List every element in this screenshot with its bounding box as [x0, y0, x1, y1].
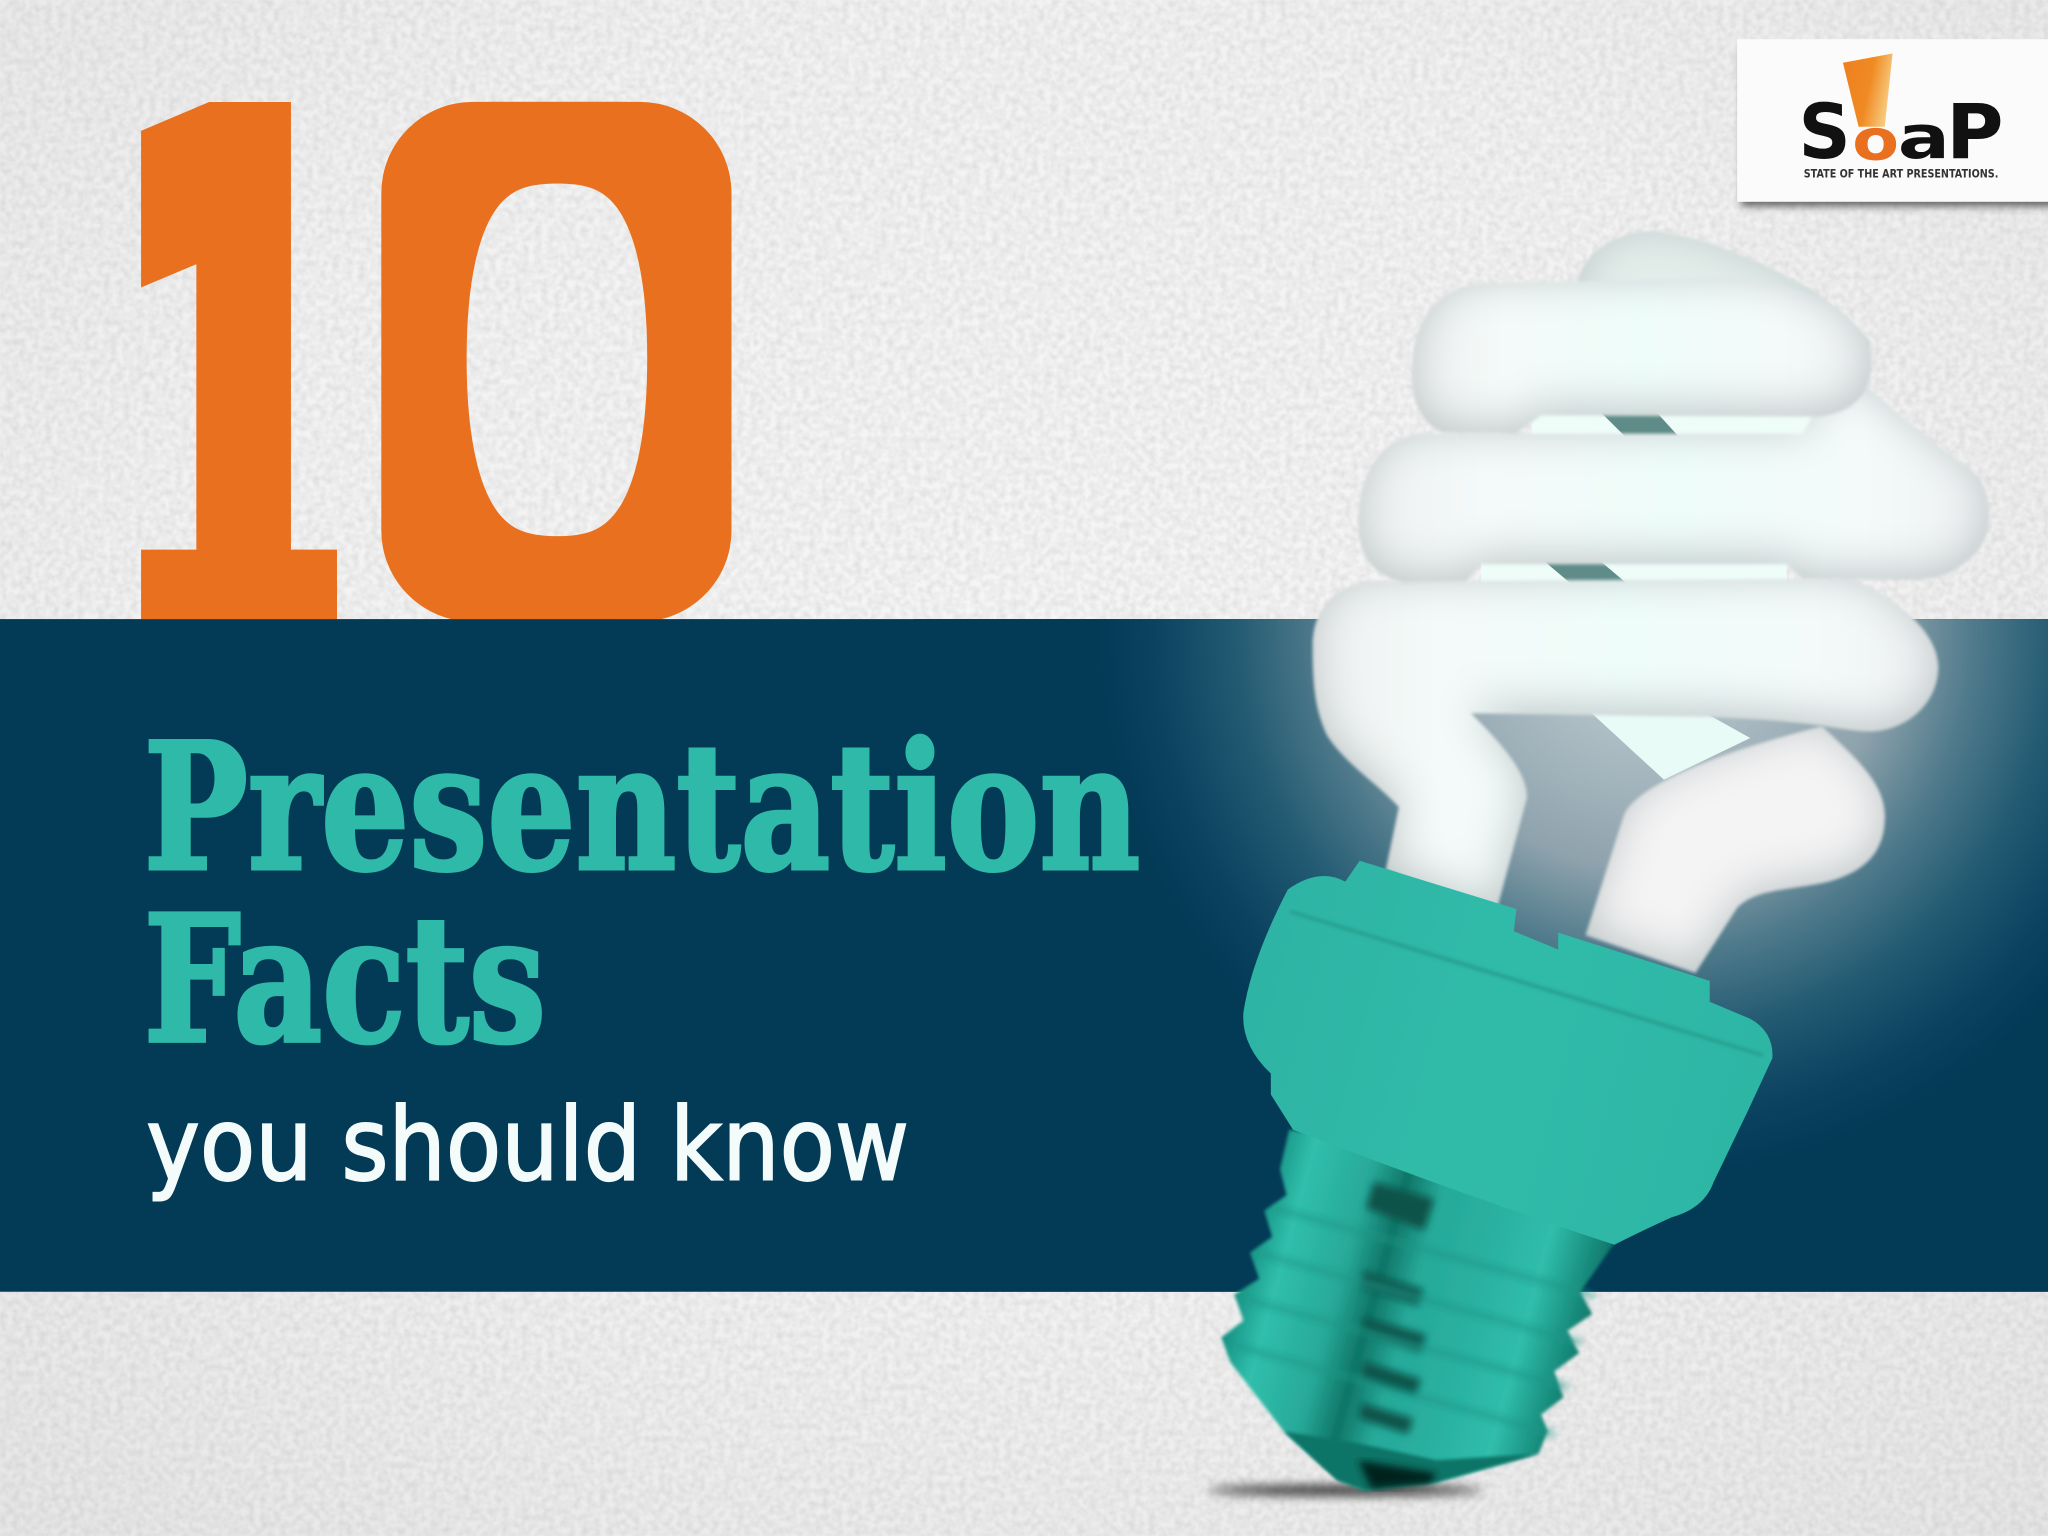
base: screw thread [1221, 1130, 1614, 1490]
big orange number 10: 1 [107, 0, 362, 853]
glass: lower coil with left leg [1313, 579, 1938, 914]
logo: SOAP: P [1946, 88, 2004, 176]
logo: SOAP: a [1898, 103, 1950, 173]
subheading: you should know: you should know [146, 1086, 909, 1203]
glass: middle coil [1358, 381, 1989, 583]
logo: SOAP: S [1799, 88, 1851, 176]
dark teal band [0, 619, 2048, 1292]
logo: SOAP [1737, 39, 2048, 206]
light glow behind bulb [914, 619, 2048, 1292]
glass: right lower leg [1586, 726, 1885, 973]
glass: back coil pieces [1481, 231, 1870, 780]
logo: SOAP: o [1852, 106, 1899, 173]
base: collar [1243, 861, 1772, 1245]
light bulb [1208, 231, 1989, 1495]
heading: Presentation Facts: Facts [144, 878, 546, 1083]
heading: Presentation Facts: Presentation [144, 706, 1140, 911]
collar groove [1290, 912, 1763, 1055]
heading: Presentation Facts [144, 706, 1140, 1083]
big orange number 10 [141, 102, 732, 620]
floor shadow [1208, 1486, 1482, 1495]
glass: upper coil [1412, 278, 1872, 434]
logo: SOAP: STATE OF THE ART PRESENTATIONS. [1804, 168, 1998, 181]
screw tip [1284, 1432, 1539, 1490]
